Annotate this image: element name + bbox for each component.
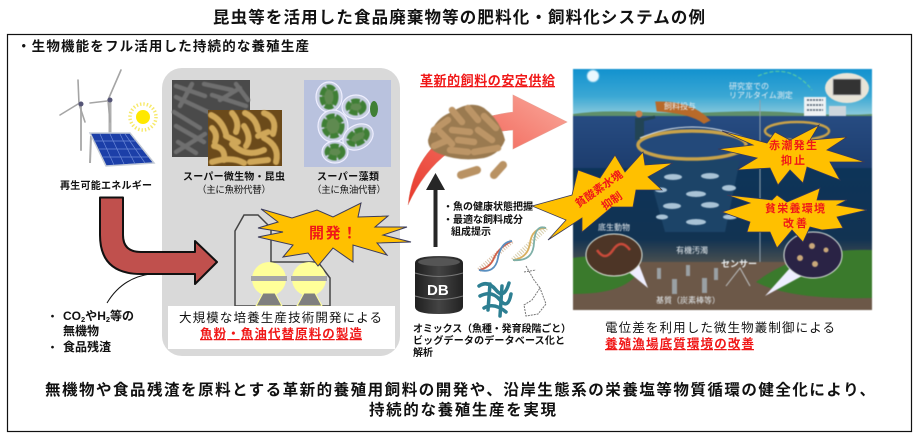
callout: development burst: 開発！	[309, 224, 357, 242]
organic pollution label: 有機汚濁	[676, 245, 708, 255]
text block: seabed improvement	[605, 320, 835, 351]
text block: raw materials: 2	[81, 315, 85, 324]
fish school	[655, 173, 737, 225]
icon: database: DB	[427, 282, 449, 299]
icon: renewable energy	[60, 70, 156, 166]
text block: large-scale culture	[168, 306, 395, 349]
icon: feed pellets	[428, 105, 505, 175]
text block: omics database: 解析	[413, 346, 433, 359]
text block: omics database: ビッグデータのデータベース化と	[413, 334, 565, 347]
callout: red tide suppression: 赤潮発生	[769, 138, 817, 152]
worker	[635, 110, 655, 140]
microbe bubble	[765, 232, 842, 296]
connector curve	[107, 274, 150, 303]
text block: fish health and feed composition	[443, 200, 533, 238]
text block: raw materials	[47, 308, 134, 354]
icon: DNA strands	[479, 227, 546, 271]
benthos label: 底生動物	[598, 222, 630, 232]
panel: gray development panel	[162, 68, 400, 356]
photo: microbes	[172, 80, 250, 157]
callout: red tide suppression: 抑止	[781, 153, 805, 167]
title: 昆虫等を活用した食品廃棄物等の肥料化・飼料化システムの例	[213, 7, 705, 27]
text block: seabed improvement: 養殖漁場底質環境の改善	[605, 336, 754, 351]
monitor bubble	[825, 73, 869, 103]
icon: sun	[130, 104, 156, 130]
arrow: feed supply	[408, 95, 567, 205]
text block: seabed improvement: 電位差を利用した微生物叢制御による	[605, 320, 835, 335]
section heading: ・生物機能をフル活用した持続的な養殖生産	[17, 38, 309, 54]
text block: raw materials: CO	[63, 309, 81, 323]
callout: development burst	[258, 203, 411, 266]
label: renewable energy: 再生可能エネルギー	[60, 179, 152, 192]
real-time measurement label	[729, 81, 793, 100]
arrow: raw materials to plant	[100, 198, 217, 284]
callout: hypoxic water suppression: 抑制	[599, 189, 625, 213]
benthos bubble	[586, 234, 648, 288]
icon: wind turbines	[60, 70, 121, 150]
text block: large-scale culture: 魚粉・魚油代替原料の製造	[200, 326, 362, 341]
text block: omics database	[413, 322, 571, 359]
text block: raw materials: や	[85, 309, 97, 323]
real-time measurement label: リアルタイム測定	[729, 90, 793, 100]
feeding arrow: 飼料投与	[664, 101, 696, 111]
feeding arrow	[657, 101, 708, 122]
caption: microbes and insects: （主に魚粉代替）	[197, 184, 271, 196]
text block: raw materials: 無機物	[63, 323, 99, 338]
callout: red tide suppression	[718, 125, 865, 185]
icon: molecule	[524, 266, 546, 316]
heading: stable feed supply: 革新的飼料の安定供給	[420, 73, 555, 88]
seabed	[573, 262, 872, 310]
caption: microbes and insects	[183, 170, 285, 196]
caption: algae	[312, 170, 386, 196]
caption: algae: （主に魚油代替）	[312, 184, 386, 196]
fish cage	[638, 127, 746, 232]
caption: algae: スーパー藻類	[317, 170, 379, 183]
sensor: センサー	[721, 259, 757, 269]
text block: raw materials: 等の	[110, 308, 134, 323]
carbon rod electrodes	[657, 265, 718, 294]
real-time measurement label: 研究室での	[729, 81, 769, 91]
arrow: database to feed	[426, 173, 445, 247]
callout: hypoxic water suppression	[532, 152, 673, 240]
underwater	[573, 168, 872, 263]
conclusion text	[45, 380, 875, 419]
shoreline	[573, 111, 872, 118]
conclusion text: 無機物や食品残渣を原料とする革新的養殖用飼料の開発や、沿岸生態系の栄養塩等物質循環の健全化により、	[45, 380, 875, 399]
illustration: aquaculture site	[573, 69, 872, 310]
text block: raw materials: H	[97, 309, 106, 323]
seagrass right	[756, 250, 872, 298]
text block: raw materials: 2	[106, 315, 110, 324]
icon: solar panel	[90, 133, 154, 166]
sensor	[721, 259, 757, 286]
text block: fish health and feed composition: 組成提示	[451, 225, 491, 238]
photo: insect larvae	[208, 110, 282, 166]
icon: database	[415, 256, 463, 314]
sea surface	[573, 116, 872, 168]
seagrass left	[573, 256, 640, 294]
lab building	[804, 97, 846, 116]
photo: microalgae	[304, 80, 391, 167]
text block: fish health and feed composition: ・最適な飼料成分	[443, 213, 523, 226]
text block: fish health and feed composition: ・魚の健康状態把握	[443, 200, 533, 213]
callout: hypoxic water suppression: 貧酸素水塊	[572, 167, 625, 210]
text block: raw materials: ・	[47, 311, 58, 323]
icon: protein structure	[479, 283, 511, 316]
sensor mast	[759, 100, 761, 262]
text block: raw materials: ・	[47, 342, 58, 354]
icon: culture plant tanks	[235, 215, 330, 306]
sky	[573, 69, 872, 115]
text block: large-scale culture: 大規模な培養生産技術開発による	[179, 310, 382, 325]
callout: oligotrophic improvement: 改善	[783, 216, 807, 230]
callout: oligotrophic improvement	[722, 188, 867, 248]
caption: microbes and insects: スーパー微生物・昆虫	[183, 170, 285, 183]
second fish cage	[765, 122, 829, 140]
conclusion text: 持続的な養殖生産を実現	[369, 400, 556, 419]
callout: oligotrophic improvement: 貧栄養環境	[765, 201, 825, 215]
text block: omics database: オミックス（魚種・発育段階ごと）	[413, 322, 571, 335]
text block: raw materials: 食品残渣	[63, 339, 111, 354]
substrate label: 基質（炭素棒等）	[656, 295, 720, 305]
